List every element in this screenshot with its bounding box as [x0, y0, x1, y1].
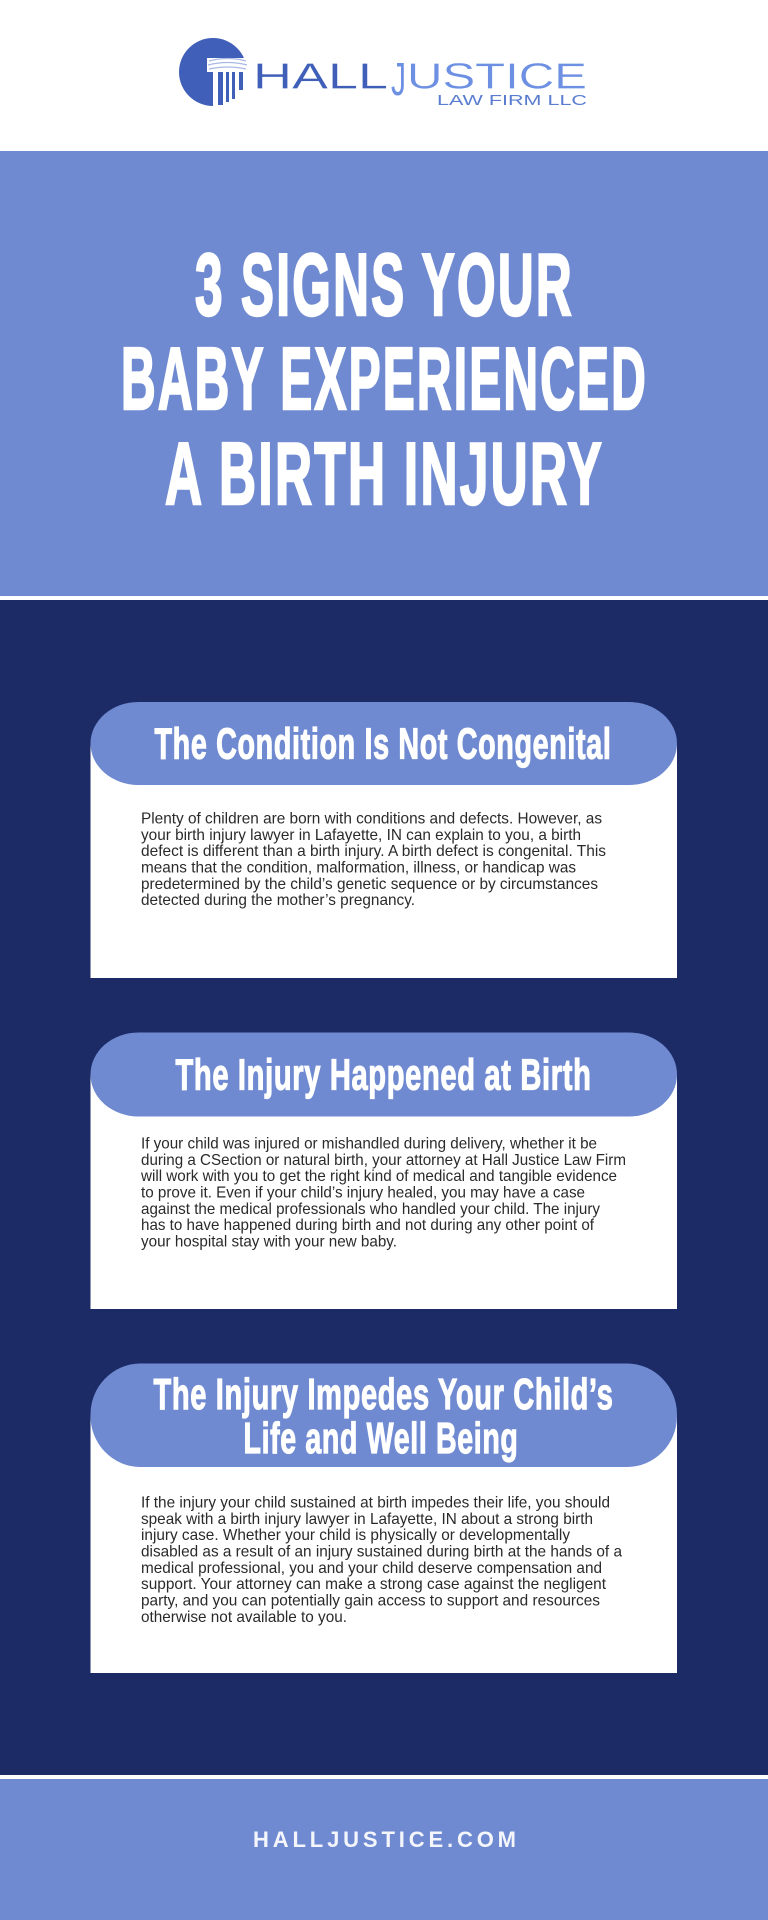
text: card 2 body: to prove it. Even if your child’s injury healed, you may have a case [141, 1184, 585, 1202]
text: card 1 body: means that the condition, malformation, illness, or handicap was [141, 860, 576, 876]
logo wordmark: USTICE [407, 56, 587, 96]
text: card 1 body: Plenty of children are born with conditions and defects. However, as [141, 810, 602, 828]
text: card 3 body: If the injury your child sustained at birth impedes their life, you should [141, 1494, 610, 1512]
logo wordmark [253, 53, 587, 105]
logo [179, 36, 587, 109]
text: card 2 body: during a CSection or natural birth, your attorney at Hall Justice Law Firm [141, 1152, 626, 1169]
text: card 1 body: defect is different than a birth injury. A birth defect is congenital. This [141, 843, 606, 860]
icon: column in circle [179, 36, 250, 108]
text: card 3 body: injury case. Whether your child is physically or developmentally [141, 1527, 570, 1544]
heading: card 3: Life and Well Being [244, 1414, 518, 1463]
text: card 3 body: support. Your attorney can make a strong case against the negligent [141, 1576, 607, 1593]
text: card 2 body [140, 1136, 626, 1250]
heading: card 3 [90, 1364, 677, 1467]
panel: card 1 [90, 702, 677, 978]
heading: card 1 [90, 702, 677, 785]
panel: card 3 [90, 1364, 677, 1673]
text: card 3 body: speak with a birth injury lawyer in Lafayette, IN about a strong birth [141, 1511, 593, 1528]
text: card 3 body: party, and you can potentially gain access to support and resources [141, 1592, 600, 1610]
text: card 2 body: has to have happened during birth and not during any other point of [141, 1217, 595, 1234]
text: card 3 body [141, 1494, 622, 1626]
panel: title band [0, 151, 768, 596]
logo tagline: LAW FIRM LLC [437, 93, 587, 109]
panel: footer band [0, 1779, 768, 1920]
logo wordmark: J [391, 53, 406, 105]
logo wordmark: HALL [253, 56, 388, 96]
panel: navy background [0, 600, 768, 1775]
footer url: HALLJUSTICE.COM [253, 1827, 516, 1852]
title [121, 235, 648, 523]
text: card 1 body: detected during the mother’s pregnancy. [141, 892, 415, 909]
text: card 1 body: your birth injury lawyer in Lafayette, IN can explain to you, a birth [141, 827, 581, 844]
panel: card 2 [90, 1032, 677, 1309]
text: card 1 body [141, 810, 606, 909]
text: card 2 body: your hospital stay with your new baby. [141, 1234, 397, 1250]
text: card 2 body: If your child was injured or mishandled during delivery, whether it be [141, 1136, 597, 1152]
text: card 2 body: against the medical professionals who handled your child. The injury [141, 1201, 600, 1218]
text: card 3 body: otherwise not available to you. [141, 1609, 347, 1626]
text: card 2 body: will work with you to get the right kind of medical and tangible evidence [140, 1168, 617, 1185]
text: card 1 body: predetermined by the child’s genetic sequence or by circumstances [141, 876, 598, 893]
text: card 3 body: medical professional, you and your child deserve compensation and [141, 1560, 602, 1577]
heading: card 2 [90, 1032, 677, 1116]
text: card 3 body: disabled as a result of an injury sustained during birth at the hands of a [141, 1544, 622, 1560]
